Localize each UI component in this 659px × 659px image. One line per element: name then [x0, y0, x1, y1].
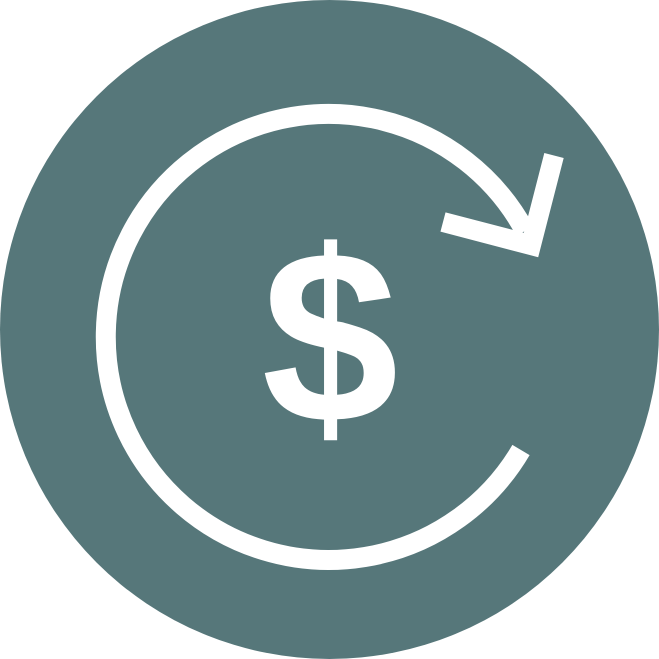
- circular arrow: [106, 114, 554, 560]
- arc: [106, 114, 525, 560]
- arrowhead: [443, 156, 554, 245]
- dollar sign: $: [262, 200, 398, 475]
